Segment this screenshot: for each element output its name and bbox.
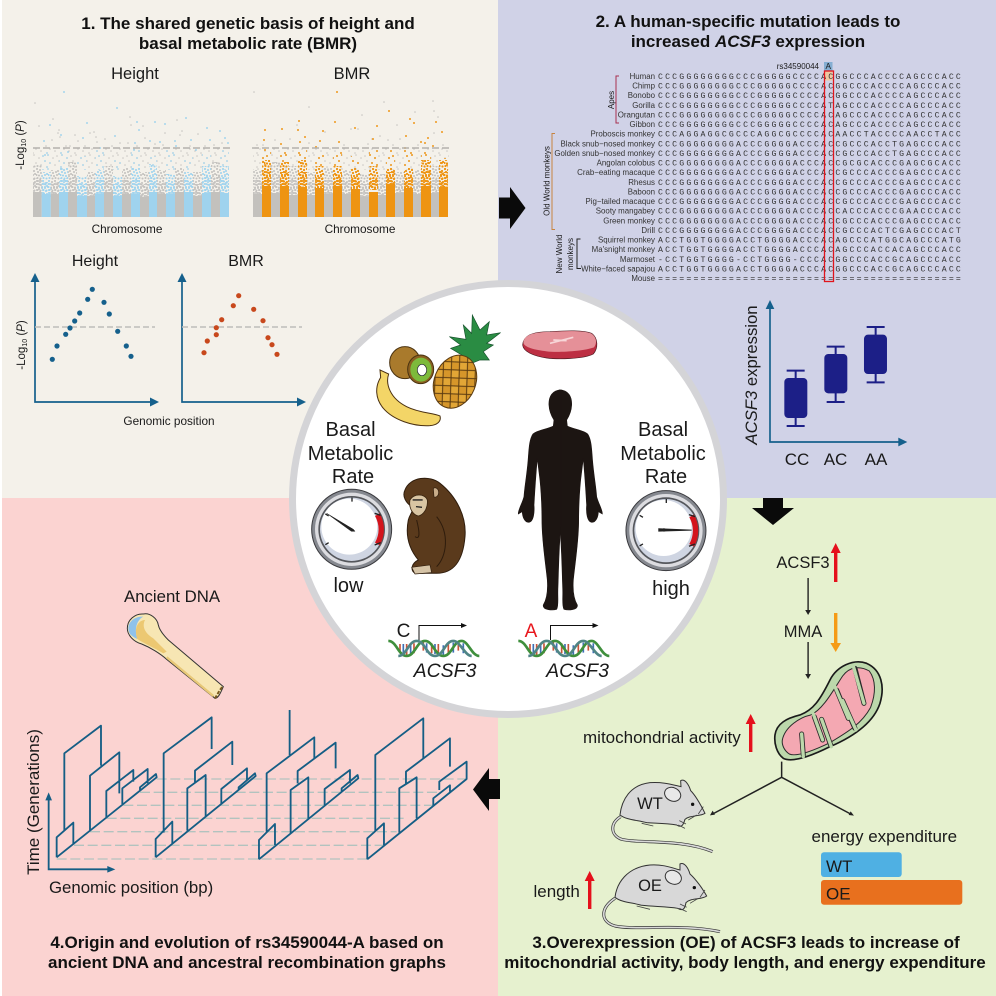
icon: human silhouette: [518, 390, 602, 610]
label: Basal Metabolic Rate left: Basal: [325, 419, 376, 441]
label: y axis: ACSF3 expression: [742, 305, 761, 446]
heading: panel 2 title: 2. A human-specific mutation leads to: [596, 12, 900, 31]
axes: [49, 798, 110, 869]
species names: Green monkey: [603, 216, 655, 225]
aligned sequences: ACCTGGTGGGGACCTGGGGACCCACAGCCCATGGCAGCCCATG: [658, 236, 963, 246]
species names: Proboscis monkey: [591, 130, 655, 139]
label: y axis Manhattan: -Log: [15, 147, 27, 170]
species names: Human: [630, 72, 655, 81]
label: Height Manhattan: Height: [111, 65, 159, 83]
label: OE: OE: [638, 877, 662, 895]
panel: origin and evolution: [2, 498, 498, 996]
central circle: [292, 284, 724, 714]
chart: ACSF3 expression box plot: [742, 300, 907, 469]
label: y axis Manhattan: (: [15, 132, 27, 139]
species names: Pig−tailed macaque: [585, 197, 656, 206]
aligned sequences: CCCGGGGGGGGACCCGGGGACCCACCGCCCACCCGAGCCCACC: [658, 217, 963, 226]
aligned sequences: CCCGGGGGGGGACCCGGGGACCCACCGCGCACCCGAGCGCACC: [658, 160, 963, 169]
aligned sequences: ACCTGGTGGGGACCTGGGGACCCACGGCCCACCGCAGCCCACC: [658, 265, 963, 274]
bracket: Apes: Apes: [607, 91, 616, 109]
threshold line: [33, 147, 231, 149]
label: position axis: Genomic position (bp): [49, 878, 213, 897]
label: genotypes: AC: [824, 450, 847, 469]
aligned sequences: CCCGGGGGGGGCCCGGGGGCCCCACGGCCCACCCCAGCCCACC: [658, 73, 963, 82]
heading: panel 2 title: increased ACSF3 expression: [631, 32, 865, 51]
bracket: New World monkeys: [555, 235, 581, 273]
bracket: Old World monkeys: [542, 134, 555, 230]
arrow: panel 3 to 4: [473, 768, 500, 811]
species names: Sooty mangabey: [596, 207, 655, 216]
SNP highlight: [824, 62, 832, 71]
label: ACSF3 gene: ACSF3: [413, 660, 477, 682]
aligned sequences: CCCGGGGGGGGACCCGGGGACCCACCGCCCACCTGAGCCCACC: [658, 140, 963, 149]
icon: DNA helix: [518, 641, 609, 656]
label: genotypes: AA: [865, 450, 888, 469]
label: ACSF3: ACSF3: [776, 554, 830, 572]
arrow: ACSF3 up: [831, 543, 841, 582]
species names: Squirrel monkey: [598, 236, 655, 244]
aligned sequences: CCCGGGGGGGGCCCGGGGGCCCCACGGCCCACCCCAGCCCACC: [658, 83, 963, 92]
species names: Marmoset: [620, 255, 656, 264]
species names: Baboon: [628, 187, 655, 196]
species names: Rhesus: [628, 178, 655, 187]
aligned sequences: CCCAGGAGGCGCCCAGGCGCCCCACAACCTACCCCAACCTACC: [658, 131, 963, 140]
label: Basal Metabolic Rate right: Metabolic: [620, 443, 706, 465]
bracket: Old World monkeys: Old World monkeys: [542, 146, 552, 216]
chart: ancestral recombination graphs: [45, 710, 467, 873]
arrow: activity up: [746, 714, 756, 752]
aligned sequences: CCCGGGGGGGGCCCGGGGGCCCCATAGCCCACCCCAGCCCACC: [658, 102, 963, 111]
label: Chromosome left: Chromosome: [92, 222, 163, 236]
species names: Drill: [641, 226, 655, 235]
species names: Orangutan: [618, 110, 655, 120]
heading: panel 1 title: 1. The shared genetic basis of height and: [81, 14, 415, 33]
bar: WT energy: WT: [826, 857, 852, 876]
species names: [554, 72, 656, 283]
icon: kiwi: [390, 347, 434, 384]
species names: Crab−eating macaque: [577, 168, 656, 177]
heading: panel 4 title: ancient DNA and ancestral recombination graphs: [48, 953, 446, 972]
label: low: low: [333, 575, 364, 597]
species names: Bonobo: [628, 91, 656, 100]
arrow: ACSF3 to MMA: [805, 578, 811, 615]
label: Basal Metabolic Rate left: Metabolic: [308, 443, 393, 465]
SNP highlight: A: [826, 62, 832, 71]
arrow: length up: [585, 871, 595, 909]
aligned sequences: -CCTGGTGGGG-CCTGGGG-CCCACGGCCCACCGCAGCCCACC: [658, 256, 963, 265]
label: y axis regional: -Log: [16, 347, 28, 370]
bracket: New World monkeys: New World: [555, 235, 564, 273]
aligned sequences: CCCGGGGGGGGACCCGGGGACCCACCGCCCACTCGAGCCCACT: [658, 227, 963, 236]
label: mitochondrial activity: mitochondrial activity: [583, 728, 741, 747]
aligned sequences: CCCGGGGGGGGACCCGGGGACCCACCACCCACCCGAACCCACC: [658, 208, 963, 217]
icon: chimpanzee: [404, 478, 465, 574]
icon: WT mouse: [613, 780, 713, 852]
graph 3: [259, 710, 358, 859]
SNP label: rs34590044: [777, 62, 820, 71]
aligned sequences: ===========================================: [658, 275, 963, 284]
heading: panel 3 title: mitochondrial activity, body length, and energy expenditure: [504, 953, 986, 972]
label: BMR regional: BMR: [228, 253, 264, 270]
icon: pineapple: [426, 315, 501, 415]
arrow: MMA to mitochondrion: [805, 642, 811, 679]
chart: BMR regional association: [178, 273, 306, 406]
label: high: high: [652, 578, 690, 600]
label: y axis regional: 10: [22, 339, 29, 347]
label: y axis regional: (: [16, 332, 28, 339]
label: ACSF3 gene: ACSF3: [545, 660, 609, 682]
label: y axis regional: P): [16, 320, 28, 332]
bracket: New World monkeys: monkeys: [566, 238, 575, 270]
label: A: A: [525, 621, 538, 642]
chart: BMR Manhattan plot: [252, 92, 450, 217]
heading: panel 4 title: [48, 933, 446, 972]
panel: human-specific mutation: [498, 0, 996, 498]
threshold line: [252, 147, 450, 149]
label: genotypes: CC: [785, 450, 809, 469]
arrow: MMA down: [830, 613, 841, 652]
human highlight: [824, 72, 832, 80]
gene: C allele: [388, 621, 479, 682]
icon: steak: [523, 331, 597, 359]
species names: Black snub−nosed monkey: [560, 139, 655, 148]
icon: mitochondrion: [775, 662, 882, 760]
species names: Mouse: [631, 274, 656, 283]
label: y axis Manhattan: 10: [21, 139, 28, 147]
bar: OE energy: OE: [826, 884, 851, 904]
aligned sequences: CCCGGGGGGGGACCCGGGGACCCACCGCCCACCCGAGCCCACC: [658, 169, 963, 178]
species names: Chimp: [632, 82, 656, 91]
aligned sequences: CCCGGGGGGGGCCCGGGGGCCCCACGGCCCACCCCAGCCCACC: [658, 92, 963, 101]
species names: Ma'snight monkey: [592, 245, 655, 254]
icon: banana: [377, 370, 440, 426]
gene: A allele: [518, 621, 609, 682]
label: Basal Metabolic Rate left: [308, 419, 393, 488]
icon: high gauge: [626, 491, 706, 571]
label: length: length: [534, 882, 580, 901]
label: Basal Metabolic Rate right: [620, 419, 706, 488]
aligned sequences: CCCGGGGGGGGCCCGGGGGCCCCACAGCCCACCCCAGCCCACC: [658, 121, 963, 130]
label: C: C: [397, 621, 410, 642]
icon: bone: [127, 614, 223, 698]
panel: overexpression of ACSF3: [498, 498, 996, 996]
arrow: promoter: [419, 626, 462, 640]
red column box: [824, 71, 834, 282]
label: energy expenditure: energy expenditure: [812, 827, 957, 846]
label: genotypes: [785, 450, 888, 469]
chart: Height regional association: [30, 273, 159, 406]
chart: sequence alignment: [542, 62, 963, 284]
icon: DNA helix: [388, 641, 479, 656]
guide lines: [57, 779, 467, 859]
species names: Angolan colobus: [597, 159, 655, 168]
graph 2: [156, 717, 256, 857]
label: Chromosome right: Chromosome: [325, 222, 396, 236]
bar: WT energy: [821, 852, 902, 877]
aligned sequences: CCCGGGGGGGGCCCGGGGGCCCCACAGCCCACCCCAGCCCACC: [658, 112, 963, 120]
heading: panel 4 title: 4.Origin and evolution of rs34590044-A based on: [50, 933, 444, 952]
heading: panel 1 title: [81, 14, 415, 53]
aligned sequences: CCCGGGGGGGGACCCGGGGACCCACCGCCCACCCGAGCCCACC: [658, 198, 963, 207]
label: y axis Manhattan: P): [15, 120, 27, 132]
label: Basal Metabolic Rate right: Basal: [638, 419, 688, 441]
arrows: branch from mitochondrion: [710, 762, 854, 816]
heading: panel 3 title: 3.Overexpression (OE) of ACSF3 leads to increase of: [532, 933, 960, 952]
icon: OE mouse: [604, 864, 720, 932]
arrow: panel 2 to 3: [752, 498, 794, 525]
species names: Gibbon: [630, 120, 655, 129]
bar: OE energy: [821, 880, 962, 905]
label: WT: WT: [637, 795, 663, 813]
aligned sequences: CCCGGGGGGGGACCCGGGGACCCACCGCCCACCCGAGCCCACC: [658, 179, 963, 188]
label: BMR Manhattan: BMR: [334, 65, 370, 83]
arrow: promoter: [550, 626, 593, 640]
species names: Gorilla: [632, 101, 656, 110]
icon: food group: [377, 315, 597, 426]
chart: Height Manhattan plot: [33, 92, 231, 217]
label: Ancient DNA: Ancient DNA: [124, 587, 221, 606]
label: MMA: MMA: [784, 623, 822, 641]
arrow: panel 1 to 2: [499, 187, 526, 229]
panel: shared genetic basis: [2, 0, 498, 498]
heading: panel 3 title: [504, 933, 986, 972]
heading: panel 2 title: [596, 12, 900, 51]
species names: White−faced sapajou: [581, 264, 655, 273]
bracket: Apes: [607, 76, 619, 123]
aligned sequences: CCCGGGGGGGGACCCGGGGACCCACCGCCCACCCGAGCCCACC: [658, 188, 963, 197]
heading: panel 1 title: basal metabolic rate (BMR): [139, 34, 357, 53]
graph 1: [57, 726, 157, 857]
label: Height regional: Height: [72, 253, 119, 270]
label: Basal Metabolic Rate left: Rate: [332, 466, 374, 488]
label: time axis: Time (Generations): [24, 729, 43, 875]
icon: low gauge: [312, 489, 392, 569]
graph 4: [367, 718, 467, 859]
species names: Golden snub−nosed monkey: [554, 149, 655, 158]
label: Genomic position: Genomic position: [123, 414, 215, 428]
aligned sequences: ACCTGGTGGGGACCTGGGGACCCACAGCCCACCACAGCCCACC: [658, 246, 963, 255]
aligned sequences: CCCGGGGGGGGACCCGGGGACCCACCGCCCACCTGAGCCCACC: [658, 150, 963, 159]
label: Basal Metabolic Rate right: Rate: [645, 466, 687, 488]
aligned sequences: [658, 73, 963, 284]
